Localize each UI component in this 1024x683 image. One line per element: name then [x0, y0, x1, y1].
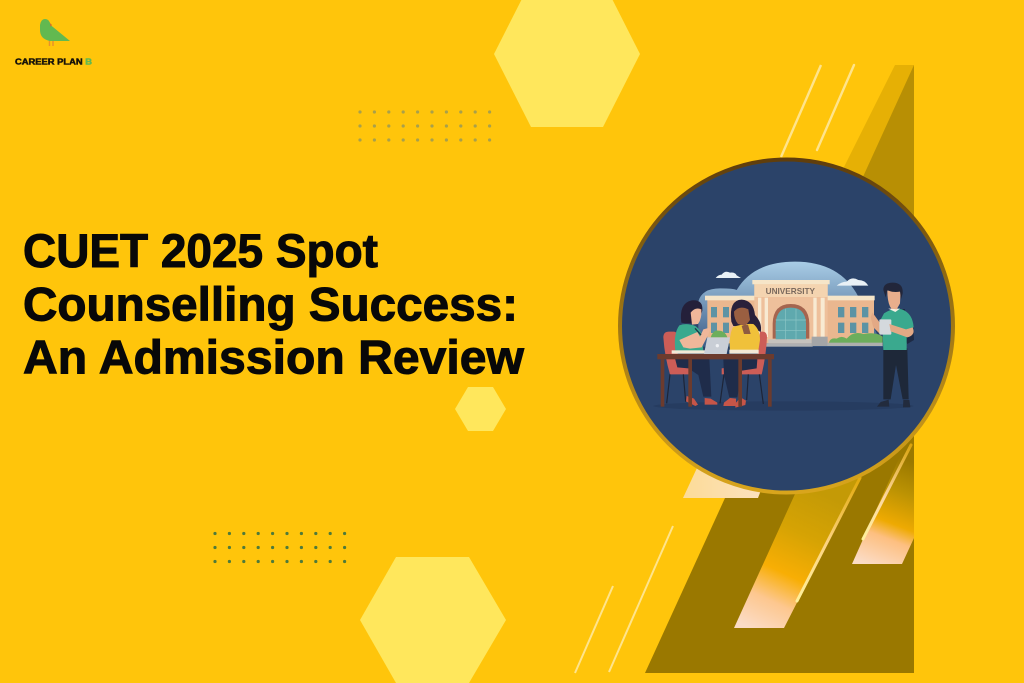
- hexagon: middle: [455, 387, 506, 431]
- line: stripe highlight right: [863, 445, 911, 539]
- forearm: [889, 324, 914, 337]
- books and laptop: [672, 337, 759, 354]
- pants: [675, 358, 711, 397]
- title: [23, 224, 524, 384]
- logo: Career Plan B: [15, 19, 92, 66]
- student right: [723, 300, 761, 408]
- shape: gradient stripe left: [734, 450, 875, 628]
- shoes: [723, 398, 736, 406]
- icon: green bird: [40, 19, 70, 46]
- shape: upper light band: [825, 65, 914, 205]
- line: top right: [817, 65, 854, 150]
- face: [734, 308, 750, 326]
- student standing: [871, 283, 914, 407]
- pants: [723, 359, 757, 397]
- building: [705, 280, 883, 347]
- shape: large dark parallelogram: [645, 425, 914, 673]
- student left: [675, 300, 717, 406]
- shoes: [877, 400, 889, 407]
- arm: [679, 327, 711, 349]
- chairs: [663, 332, 767, 404]
- cloud left: [716, 272, 741, 278]
- table: [657, 354, 774, 407]
- columns: [758, 298, 825, 337]
- university label: UNIVERSITY: [766, 286, 815, 296]
- cloud right: [837, 278, 868, 286]
- arched door: [773, 304, 809, 339]
- decorative slanted shapes: [645, 65, 914, 673]
- shirt: [879, 309, 914, 350]
- backpack: [899, 309, 914, 344]
- dot grid: top: [358, 110, 491, 142]
- hair back: [681, 300, 702, 323]
- central block: [754, 283, 828, 340]
- chair left: [663, 332, 690, 374]
- hair: [883, 283, 903, 299]
- title: An Admission Review: [23, 330, 524, 384]
- shoes: [686, 396, 698, 406]
- line: top left: [781, 65, 821, 157]
- shape: upper dark triangle: [841, 65, 914, 225]
- shirt: [730, 324, 760, 351]
- shirt: [675, 324, 703, 351]
- logo wordmark: CAREER PLAN B: [15, 56, 92, 66]
- wings: [707, 299, 874, 343]
- neck and face: [887, 291, 901, 309]
- title: Counselling Success:: [23, 278, 518, 330]
- navy circle: [620, 160, 953, 492]
- hexagon: top: [494, 0, 640, 127]
- line: bottom short: [575, 586, 613, 673]
- windows: [711, 307, 868, 333]
- chair right: [722, 332, 767, 374]
- shape: gradient stripe right: [852, 445, 914, 564]
- collar: [888, 309, 900, 312]
- pants: [883, 348, 909, 399]
- sky dome: [698, 262, 883, 347]
- circle panel: university illustration: [620, 160, 953, 492]
- hair: [731, 300, 761, 332]
- tablet: [879, 319, 891, 335]
- illustration: [653, 262, 914, 411]
- dot grid: bottom: [213, 532, 346, 563]
- shape: pale strip behind circle: [683, 440, 780, 498]
- line: stripe highlight left: [797, 478, 860, 601]
- hand: [742, 325, 751, 334]
- steps: [768, 339, 812, 343]
- bushes and pavement: [829, 333, 883, 343]
- hexagon: bottom: [360, 557, 506, 683]
- title: CUET 2025 Spot: [23, 224, 378, 277]
- ground shadow: [653, 401, 913, 411]
- raised arm: [871, 312, 884, 335]
- pen: [695, 328, 701, 335]
- face: [691, 309, 701, 325]
- line: bottom long: [609, 526, 673, 672]
